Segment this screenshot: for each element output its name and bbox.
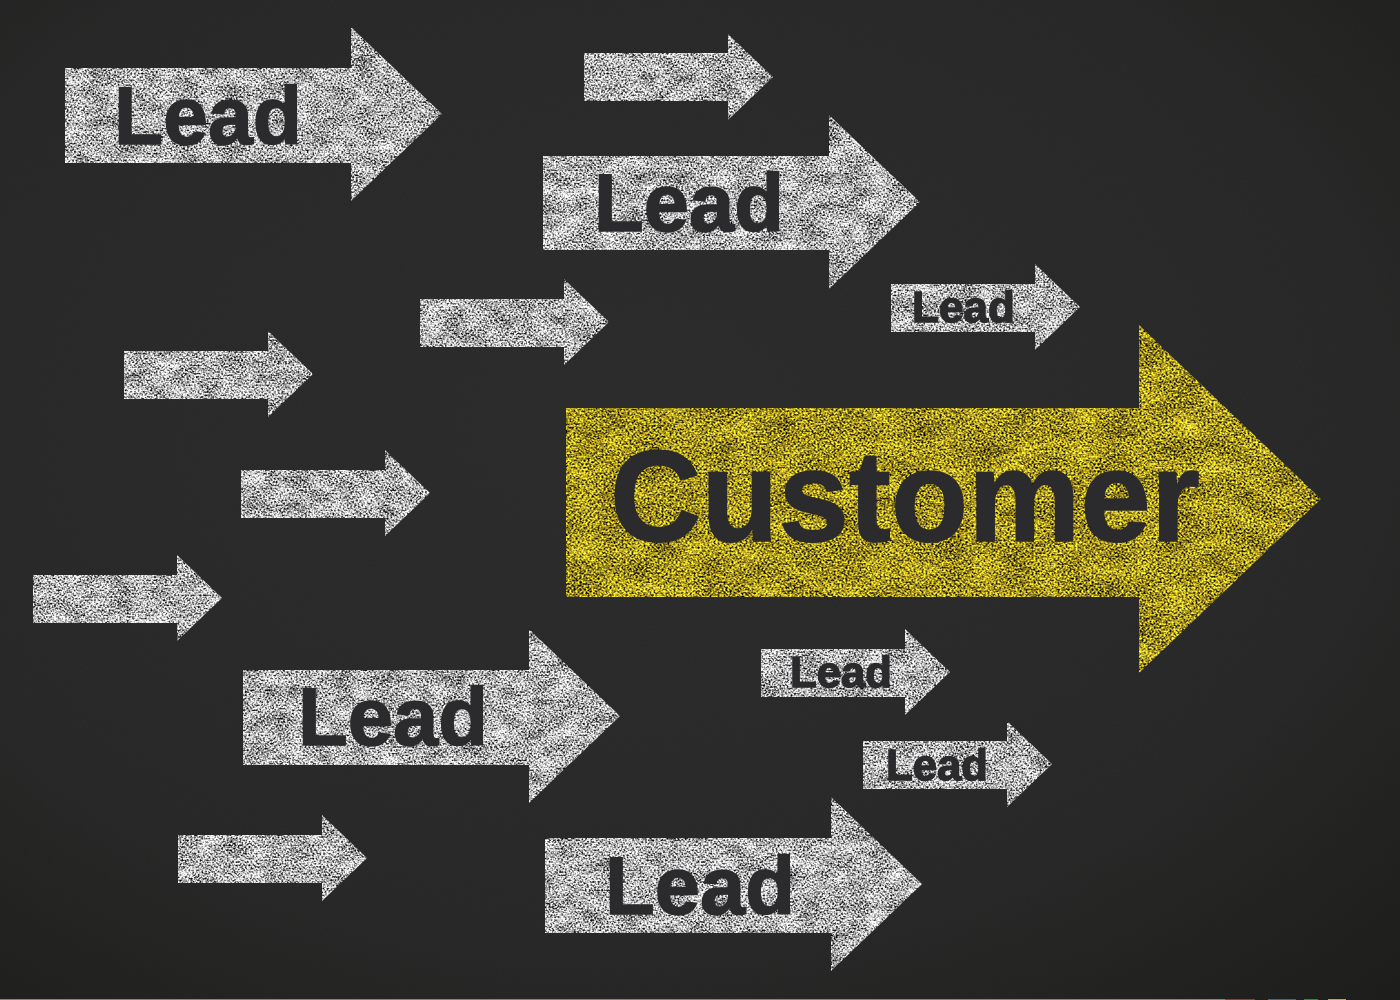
arrow: Lead, lower centre left: Lead bbox=[298, 672, 488, 763]
arrow: blank, middle centre bbox=[420, 279, 609, 365]
arrow: Lead, upper centre: Lead bbox=[594, 158, 784, 249]
arrow: Lead, upper centre bbox=[543, 115, 920, 289]
arrow: Lead, bottom centre: Lead bbox=[605, 841, 795, 932]
arrow: blank, top centre bbox=[584, 34, 773, 120]
arrow: Lead, top left: Lead bbox=[114, 71, 302, 162]
arrow: blank, far left bbox=[33, 555, 222, 641]
arrow: Customer, yellow bbox=[566, 325, 1321, 673]
arrow: blank, middle left bbox=[124, 331, 313, 417]
arrow: Lead, top left bbox=[65, 27, 442, 201]
arrow: small Lead, below Customer bbox=[761, 629, 950, 715]
arrow: small Lead, below Customer: Lead bbox=[790, 648, 892, 697]
arrow: small Lead, lower right: Lead bbox=[886, 741, 988, 790]
arrow: Customer, yellow: Customer bbox=[610, 423, 1200, 569]
arrow: Lead, lower centre left bbox=[243, 629, 620, 803]
arrow: small Lead, lower right bbox=[863, 721, 1052, 807]
arrow: blank, centre left bbox=[241, 450, 430, 536]
arrow: blank, bottom left bbox=[178, 815, 367, 901]
arrow: small Lead, upper right: Lead bbox=[912, 283, 1015, 332]
arrow: small Lead, upper right bbox=[891, 264, 1080, 350]
arrow: Lead, bottom centre bbox=[545, 797, 922, 971]
